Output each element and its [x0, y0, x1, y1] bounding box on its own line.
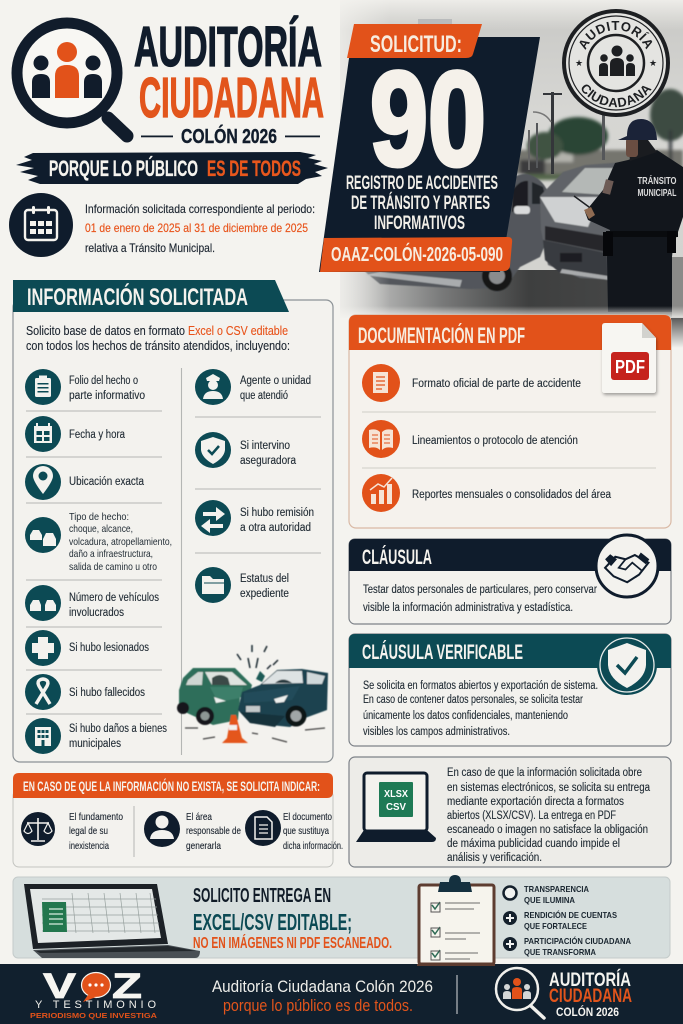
delivery text: EXCEL/CSV EDITABLE;: [193, 909, 352, 935]
logo: voz y testimonio: V: [43, 967, 77, 1006]
item: lineamientos: Lineamientos o protocolo de atención: [412, 435, 578, 447]
stamp: auditoría ciudadana: ★: [575, 58, 583, 68]
values list: RENDICIÓN DE CUENTAS: [524, 909, 617, 920]
panel: exportación XLSX/CSV: [349, 757, 671, 867]
item: tipo de hecho: volcadura, atropellamiento,: [69, 536, 172, 548]
item: agente: [195, 369, 311, 405]
logo: auditoría ciudadana small: COLÓN 2026: [556, 1006, 619, 1019]
item: área responsable: El área: [186, 811, 212, 823]
heading: DOCUMENTACIÓN EN PDF: [358, 323, 525, 348]
item: fundamento legal: legal de su: [69, 825, 108, 837]
stamp: auditoría ciudadana: CIUDADANA: [582, 84, 652, 108]
panel: documentación en PDF: [349, 315, 671, 528]
item: documento sustituto: dicha información.: [283, 840, 343, 852]
item: tipo de hecho: choque, alcance,: [69, 523, 133, 535]
heading: INFORMACIÓN SOLICITADA: [27, 283, 248, 311]
delivery text: SOLICITO ENTREGA EN: [193, 885, 331, 907]
banner: [13, 773, 333, 798]
footer slogan: Auditoría Ciudadana Colón 2026: [212, 977, 433, 996]
body text: [363, 584, 597, 614]
body text: escaneado o imagen no satisface la obligación: [447, 824, 648, 836]
body text: En caso de contener datos personales, se solicita testar: [363, 694, 583, 706]
item: fallecidos: Si hubo fallecidos: [69, 687, 145, 699]
item: agente: Agente o unidad: [240, 375, 311, 387]
body text: análisis y verificación.: [447, 852, 542, 864]
heading: [349, 634, 671, 668]
item: formato oficial: [362, 364, 581, 402]
item: fundamento legal: El fundamento: [69, 811, 123, 823]
item: fundamento legal: [21, 811, 123, 852]
values list: TRANSPARENCIA: [524, 884, 589, 894]
logo: auditoría ciudadana small: AUDITORÍA: [549, 969, 631, 991]
panel: información solicitada: [13, 280, 333, 762]
body text: únicamente los datos confidenciales, manteniendo: [363, 710, 568, 722]
item: área responsable: responsable de: [186, 825, 241, 837]
logo: magnifier with citizens: [17, 23, 127, 136]
folio tag: OAAZ-COLÓN-2026-05-090: [331, 242, 503, 266]
heading: CLÁUSULA: [362, 546, 432, 569]
item: agente: que atendió: [240, 390, 288, 402]
item: daños a bienes: [25, 718, 167, 754]
intro text: [26, 324, 290, 353]
band: entrega editable: [13, 875, 670, 964]
tagline brush banner: ES DE TODOS: [207, 156, 301, 181]
item: aseguradora: [195, 432, 297, 468]
item: remisión: a otra autoridad: [240, 522, 311, 534]
item: número de vehículos: Número de vehículos: [69, 592, 159, 604]
request subject: DE TRÁNSITO Y PARTES: [351, 192, 490, 214]
item: lesionados: [25, 630, 149, 666]
title: COLÓN 2026: [181, 124, 277, 148]
item: documento sustituto: que sustituya: [283, 825, 329, 837]
clipboard: [419, 875, 494, 964]
item: estatus: Estatus del: [240, 573, 289, 585]
period text: [85, 202, 315, 255]
delivery text: [193, 885, 392, 952]
heading: [13, 280, 289, 312]
item: ubicación: [25, 464, 145, 500]
logo: auditoría ciudadana small: [496, 968, 632, 1019]
panel: en caso de que no exista: [13, 773, 343, 867]
title: CIUDADANA: [139, 66, 324, 130]
values list: QUE FORTALECE: [524, 921, 587, 931]
footer slogan: [212, 977, 433, 1015]
item: daños a bienes: municipales: [69, 738, 121, 750]
icon: shield check: [597, 635, 657, 695]
item: lesionados: Si hubo lesionados: [69, 642, 149, 654]
heading: CLÁUSULA VERIFICABLE: [362, 641, 523, 664]
item: número de vehículos: involucrados: [69, 607, 124, 619]
laptop spreadsheet: [24, 884, 200, 958]
photo: traffic officer at crash scene: [320, 0, 683, 348]
crashed silver car: [540, 162, 625, 280]
request subject: [346, 173, 498, 234]
item: fallecidos: [25, 674, 145, 710]
panel: cláusula: [349, 535, 671, 624]
item: fecha: [25, 416, 125, 452]
title: [134, 15, 324, 148]
icon: PDF file: PDF: [615, 357, 645, 377]
solicitud tag: SOLICITUD:: [370, 31, 462, 58]
body text: Se solicita en formatos abiertos y exportación de sistema.: [363, 680, 598, 692]
item: aseguradora: Si intervino: [240, 440, 290, 452]
intro text: Excel o CSV editable: [188, 324, 288, 338]
logo: voz y testimonio: Z: [112, 967, 142, 1006]
heading: [349, 539, 671, 571]
body text: visibles los campos administrativos.: [363, 726, 510, 738]
road: [340, 270, 683, 318]
tagline brush banner: [16, 152, 328, 184]
intro text: Solicito base de datos en formato: [26, 324, 185, 338]
item: estatus: [195, 567, 289, 603]
item: documento sustituto: El documento: [283, 811, 332, 823]
item: lineamientos: [362, 420, 578, 458]
heading: [349, 315, 671, 350]
delivery text: NO EN IMÁGENES NI PDF ESCANEADO.: [193, 933, 392, 952]
body text: en sistemas electrónicos, se solicita su entrega: [447, 782, 651, 794]
item: reportes: [362, 474, 612, 512]
body text: [363, 680, 598, 738]
number 90: 90: [370, 45, 486, 194]
item: aseguradora: aseguradora: [240, 455, 297, 467]
body text: En caso de que la información solicitada obre: [447, 767, 642, 779]
logo: voz y testimonio: Y TESTIMONIO: [35, 999, 156, 1011]
item: tipo de hecho: daño a infraestructura,: [69, 548, 153, 560]
body text: [447, 767, 651, 864]
tagline brush banner: PORQUE LO PÚBLICO: [49, 156, 198, 181]
item: tipo de hecho: Tipo de hecho:: [69, 511, 129, 523]
item: número de vehículos: [25, 585, 159, 621]
item: tipo de hecho: [25, 511, 172, 573]
body text: abiertos (XLSX/CSV). La entrega en PDF: [447, 810, 616, 822]
logo: voz y testimonio: [30, 967, 158, 1020]
item: remisión: [195, 500, 314, 536]
period text: relativa a Tránsito Municipal.: [85, 241, 215, 255]
item: fundamento legal: inexistencia: [69, 840, 109, 852]
title: AUDITORÍA: [134, 15, 322, 79]
period text: Información solicitada correspondiente al periodo:: [85, 202, 315, 216]
item: reportes: Reportes mensuales o consolidados del área: [412, 489, 612, 501]
solicitud tag: [347, 24, 482, 58]
stamp: auditoría ciudadana: AUDITORÍA: [580, 21, 652, 50]
values list: [503, 884, 631, 957]
item: daños a bienes: Si hubo daños a bienes: [69, 723, 167, 735]
intro text: con todos los hechos de tránsito atendidos, incluyendo:: [26, 339, 290, 353]
icon: handshake: [596, 535, 658, 597]
item: folio: [25, 369, 145, 405]
illustration: two crashed cars and cone: [177, 645, 328, 743]
values list: QUE TRANSFORMA: [524, 947, 596, 957]
item: área responsable: generarla: [186, 840, 221, 852]
item: estatus: expediente: [240, 588, 289, 600]
item: remisión: Si hubo remisión: [240, 507, 314, 519]
values list: PARTICIPACIÓN CIUDADANA: [524, 935, 631, 946]
item: área responsable: [144, 811, 241, 852]
body text: de máxima publicidad cuando impide el: [447, 838, 620, 850]
item: ubicación: Ubicación exacta: [69, 476, 145, 488]
period text: 01 de enero de 2025 al 31 de diciembre de 2025: [85, 221, 308, 235]
footer slogan: porque lo público es de todos.: [223, 996, 413, 1015]
clipboard foot overlap: [417, 964, 495, 966]
footer: [0, 964, 683, 1024]
logo: auditoría ciudadana small: CIUDADANA: [549, 986, 632, 1007]
body text: mediante exportación directa a formatos: [447, 796, 624, 808]
request number panel: [319, 24, 540, 272]
item: fecha: Fecha y hora: [69, 429, 125, 441]
item: folio: parte informativo: [69, 390, 145, 402]
icon: calendar: [9, 193, 73, 257]
crashed grey car: [363, 162, 625, 291]
icon: laptop xlsx csv: CSV: [386, 802, 406, 813]
values list: QUE ILUMINA: [524, 895, 575, 905]
panel: cláusula verificable: [349, 634, 671, 746]
stamp: auditoría ciudadana: ★: [649, 58, 657, 68]
request subject: INFORMATIVOS: [374, 213, 465, 234]
logo: voz y testimonio: PERIODISMO QUE INVESTIGA: [30, 1011, 158, 1020]
police officer: [574, 119, 683, 312]
stamp: auditoría ciudadana: [562, 9, 670, 117]
icon: laptop xlsx csv: XLSX: [384, 789, 408, 800]
banner: EN CASO DE QUE LA INFORMACIÓN NO EXISTA, SE SOLICITA INDICAR:: [23, 779, 320, 794]
icon: laptop xlsx csv: [356, 773, 436, 842]
icon: PDF file: [602, 323, 656, 393]
body text: visible la información administrativa y estadística.: [363, 602, 573, 614]
item: tipo de hecho: salida de camino u otro: [69, 561, 157, 573]
item: documento sustituto: [245, 810, 343, 852]
item: formato oficial: Formato oficial de parte de accidente: [412, 378, 581, 390]
folio tag: [320, 237, 512, 272]
body text: Testar datos personales de particulares, pero conservar: [363, 584, 597, 596]
item: folio: Folio del hecho o: [69, 375, 138, 387]
request subject: REGISTRO DE ACCIDENTES: [346, 173, 498, 194]
